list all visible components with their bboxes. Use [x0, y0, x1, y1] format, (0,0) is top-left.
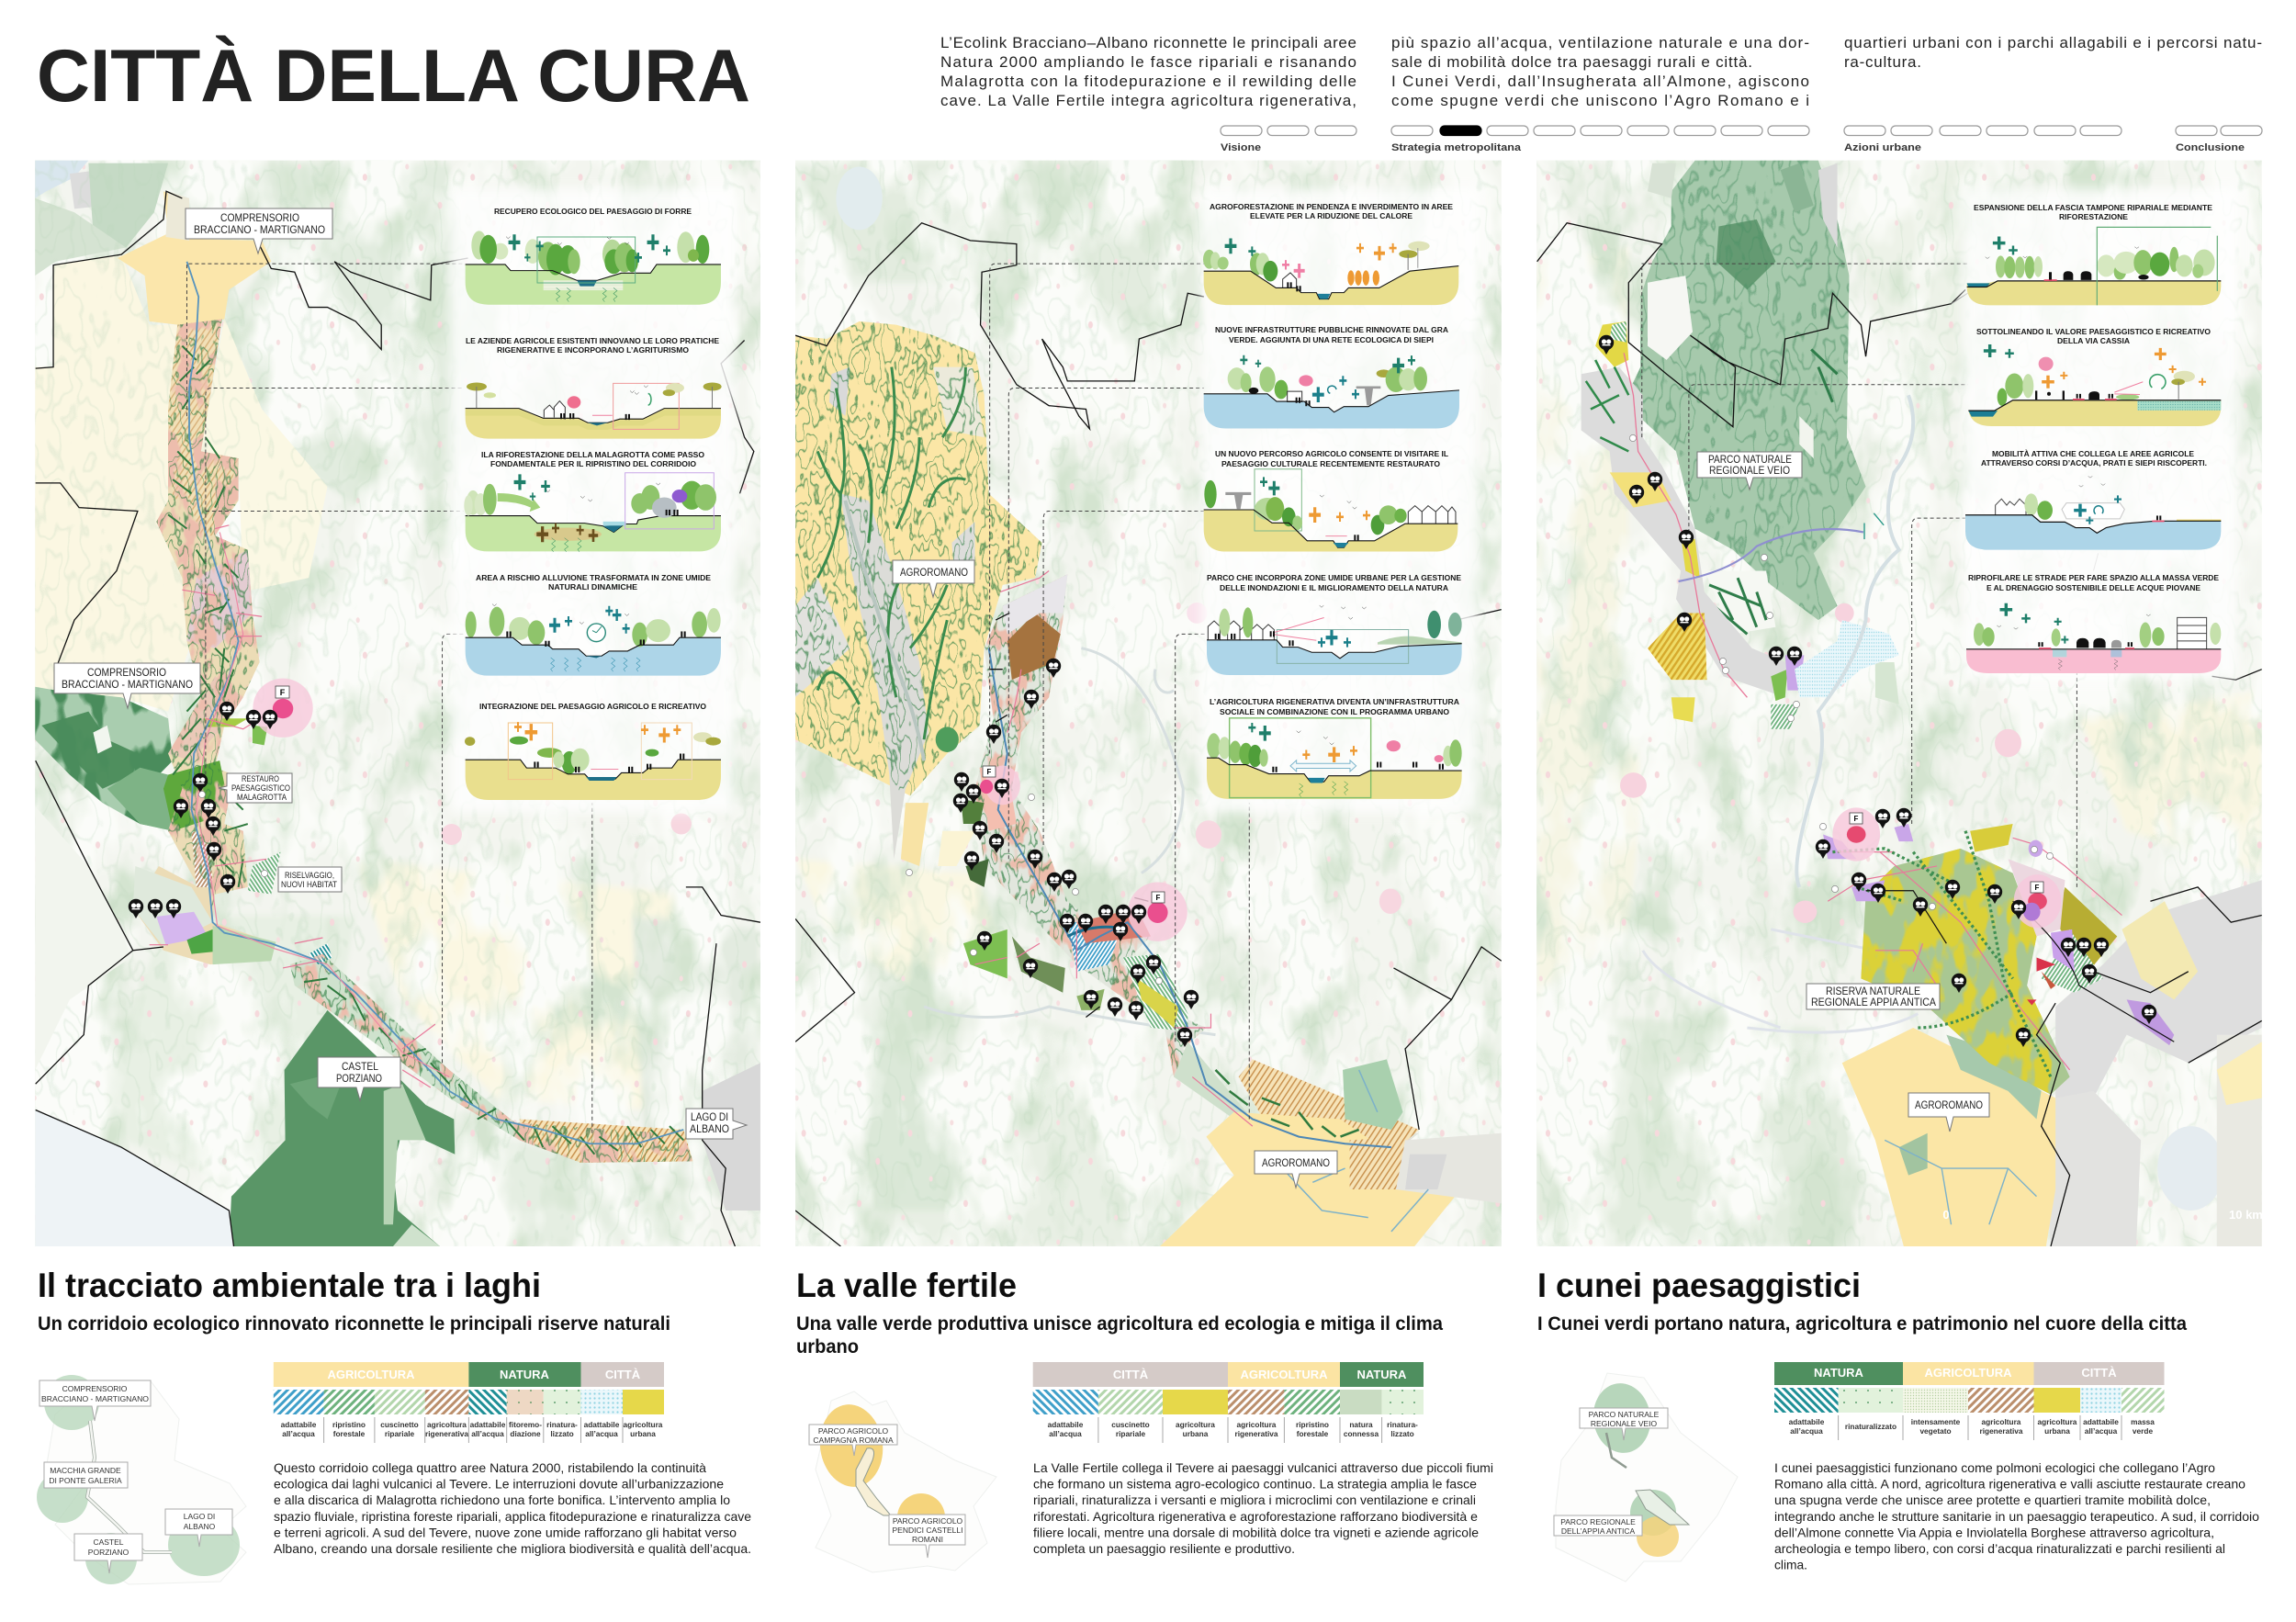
map 2 icons: F — [987, 768, 992, 776]
progress navigation labels: Visione — [1221, 142, 1261, 153]
block 1 subheading: Un corridoio ecologico rinnovato riconnette le principali riserve naturali — [38, 1313, 670, 1335]
callout: Agroromano north: AGROROMANO — [900, 568, 968, 579]
block 3 body text: Romano alla città. A nord, agricoltura rigenerativa e valli asciutte restaurate creano — [1774, 1477, 2245, 1492]
callout: Lago di Albano: LAGO DI — [691, 1112, 728, 1123]
section titles, map 2: L’AGRICOLTURA RIGENERATIVA DIVENTA UN’INFRASTRUTTURA — [1210, 697, 1459, 706]
callout: Riserva Naturale Regionale Appia Antica — [1806, 984, 1940, 1009]
progress navigation labels: Azioni urbane — [1844, 142, 1921, 153]
block 2 legend: urbana — [1183, 1429, 1209, 1438]
section titles, map 3: DELLA VIA CASSIA — [2057, 336, 2130, 345]
block 2 legend: adattabile — [1048, 1420, 1084, 1429]
block 2 body text: completa un paesaggio resiliente e produttivo. — [1033, 1541, 1295, 1556]
block 3 mini map: PARCO REGIONALE — [1560, 1517, 1636, 1526]
block 3 legend — [1774, 1362, 2164, 1440]
pink node halo — [253, 679, 313, 738]
block 1 body text — [274, 1460, 751, 1556]
callout: Castel Porziano: PORZIANO — [336, 1074, 382, 1085]
block 1 legend: AGRICOLTURA — [327, 1368, 415, 1381]
callout: Agroromano south — [1255, 1151, 1337, 1188]
dashed leader lines — [990, 264, 1249, 1119]
block 1 mini map: MACCHIA GRANDE — [50, 1466, 121, 1475]
block 1 mini map: PORZIANO — [88, 1548, 129, 1557]
intro text, three columns: Malagrotta con la fitodepurazione e il rewilding delle — [940, 73, 1356, 90]
intro text, three columns: ra-cultura. — [1844, 53, 1921, 71]
callout: Restauro paesaggistico Malagrotta — [219, 773, 292, 803]
block 1 body text: Albano, creando una dorsale resiliente che migliora biodiversità e qualità dell’acqua. — [274, 1541, 751, 1556]
callout: Parco Naturale Regionale Veio: REGIONALE VEIO — [1709, 466, 1790, 477]
south gray land and lakes — [2055, 880, 2262, 1098]
callout: Lago di Albano: ALBANO — [690, 1124, 729, 1135]
section titles, map 2: SOCIALE IN COMBINAZIONE CON IL PROGRAMMA URBANO — [1220, 707, 1449, 716]
map 3 scale labels: 0 — [1942, 1208, 1950, 1222]
block 1 body text: e terreni agricoli. A sud del Tevere, nuove zone umide rafforzano gli habitat verso — [274, 1525, 737, 1539]
section titles, map 1 — [466, 207, 719, 711]
block 2 legend: CITTÀ — [1113, 1368, 1149, 1381]
section: slope agroforestry — [1203, 239, 1458, 305]
callout: Comprensorio Bracciano Martignano lower — [54, 663, 200, 708]
block 3 subheading: I Cunei verdi portano natura, agricoltura e patrimonio nel cuore della citta — [1537, 1313, 2187, 1335]
block 2 legend: agricoltura — [1176, 1420, 1215, 1429]
block 3 legend: vegetato — [1919, 1426, 1952, 1436]
section: flood wetlands — [466, 604, 721, 676]
block 1 legend: adattabile — [281, 1420, 317, 1429]
block 2 subheading — [796, 1313, 1443, 1357]
block 1 mini map: LAGO DI — [184, 1512, 215, 1521]
section: forre recovery — [466, 231, 721, 305]
callout: Lago di Albano — [686, 1109, 747, 1139]
block 3 legend: all’acqua — [1790, 1426, 1823, 1436]
block 1 legend: agricoltura — [427, 1420, 467, 1429]
block 2 mini map: ROMANI — [912, 1535, 943, 1544]
Agro Romano yellow area — [795, 321, 1042, 795]
pale agricultural land left — [35, 254, 189, 718]
section: road reprofiling — [1966, 603, 2221, 673]
block 2 mini map: PARCO AGRICOLO — [818, 1426, 889, 1436]
section titles, map 1: RECUPERO ECOLOGICO DEL PAESAGGIO DI FORRE — [494, 207, 692, 216]
section titles, map 3: MOBILITÀ ATTIVA CHE COLLEGA LE AREE AGRICOLE — [1992, 449, 2194, 458]
block 3 body text: una spugna verde che unisce aree protette e quartieri tramite mobilità dolce, — [1774, 1492, 2211, 1507]
section titles, map 3: RIFORESTAZIONE — [2059, 212, 2128, 221]
intro text, three columns: quartieri urbani con i parchi allagabili e i percorsi natu- — [1844, 34, 2262, 51]
block 2 legend: agricoltura — [1237, 1420, 1277, 1429]
block 3 legend: adattabile — [2083, 1417, 2119, 1426]
callout: Agroromano south: AGROROMANO — [1262, 1158, 1330, 1169]
section diagrams, map 2 — [1203, 239, 1462, 799]
callout: Agroromano: AGROROMANO — [1915, 1100, 1983, 1111]
block 1 legend: CITTÀ — [605, 1368, 641, 1381]
panel: map 3, cunei paesaggistici — [1536, 161, 2262, 1246]
progress navigation labels — [1221, 142, 2245, 153]
block 1 heading: Il tracciato ambientale tra i laghi — [38, 1267, 541, 1304]
block 3 body text: integrando anche le strutture sanitarie in un paesaggio terapeutico. A sud, il corridoio — [1774, 1509, 2259, 1524]
callout: Riselvaggio nuovi habitat: RISELVAGGIO, — [285, 871, 334, 880]
block 3 heading: I cunei paesaggistici — [1537, 1267, 1861, 1304]
section titles, map 2: DELLE INONDAZIONI E IL MIGLIORAMENTO DELLA NATURA — [1220, 583, 1448, 592]
dashed leader lines — [1642, 264, 2077, 887]
map 2 icons: F — [1156, 894, 1161, 902]
map 3 scale labels: 10 km — [2229, 1208, 2263, 1222]
block 2 legend: rigenerativa — [1234, 1429, 1278, 1438]
block 3 legend: rinaturalizzato — [1845, 1422, 1896, 1431]
section titles, map 1: FONDAMENTALE PER IL RIPRISTINO DEL CORRIDOIO — [490, 459, 696, 468]
forest area left — [35, 687, 173, 831]
block 1 mini map: BRACCIANO - MARTIGNANO — [41, 1394, 149, 1403]
section: public infrastructure — [1204, 355, 1459, 429]
section diagrams, map 3 — [1965, 227, 2221, 673]
section titles, map 1: LE AZIENDE AGRICOLE ESISTENTI INNOVANO LE LORO PRATICHE — [466, 336, 719, 345]
section titles, map 2: NUOVE INFRASTRUTTURE PUBBLICHE RINNOVATE DAL GRA — [1215, 325, 1448, 334]
callout: Castel Porziano: CASTEL — [342, 1062, 379, 1073]
progress navigation labels: Strategia metropolitana — [1391, 142, 1522, 153]
block 1 legend: all’acqua — [282, 1429, 315, 1438]
block 1 legend: ripristino — [332, 1420, 366, 1429]
block 1 legend: cuscinetto — [380, 1420, 419, 1429]
callout: Riselvaggio nuovi habitat — [278, 867, 342, 892]
intro text, three columns: Natura 2000 ampliando le fasce ripariali e risanando — [940, 53, 1356, 71]
block 2 mini map: PARCO AGRICOLO — [893, 1516, 963, 1526]
section titles, map 1: NATURALI DINAMICHE — [548, 582, 637, 591]
block 2 subheading: urbano — [796, 1336, 859, 1357]
callout: Riserva Naturale Regionale Appia Antica: RISERVA NATURALE — [1826, 986, 1920, 997]
corridor — [133, 320, 276, 964]
block 1 mini map: COMPRENSORIO — [62, 1384, 128, 1393]
callout: Agroromano — [1908, 1093, 1989, 1132]
section titles, map 3: ESPANSIONE DELLA FASCIA TAMPONE RIPARIALE MEDIANTE — [1974, 203, 2212, 212]
block 2 legend: connessa — [1344, 1429, 1379, 1438]
block 2 legend: ripariale — [1116, 1429, 1146, 1438]
block 3 body text: clima. — [1774, 1558, 1807, 1572]
block 2 legend: forestale — [1297, 1429, 1329, 1438]
corridor — [975, 574, 1419, 1155]
callout: Comprensorio Bracciano Martignano top: COMPRENSORIO — [220, 213, 299, 224]
block 2 body text: La Valle Fertile collega il Tevere ai paesaggi vulcanici attraverso due piccoli fiumi — [1033, 1460, 1493, 1475]
progress navigation pills — [1221, 126, 2262, 136]
block 2 mini map: CAMPAGNA ROMANA — [813, 1436, 894, 1445]
section titles, map 3: E AL DRENAGGIO SOSTENIBILE DELLE ACQUE PIOVANE — [1986, 583, 2200, 592]
map 3 scale labels — [1942, 1208, 2263, 1222]
block 3 legend: verde — [2133, 1426, 2153, 1436]
block 3 legend: AGRICOLTURA — [1924, 1366, 2012, 1380]
map 1 icons — [129, 686, 289, 918]
block 3 mini map — [1554, 1373, 1738, 1582]
block 3 body text — [1774, 1460, 2259, 1572]
section titles, map 1: INTEGRAZIONE DEL PAESAGGIO AGRICOLO E RICREATIVO — [479, 702, 706, 711]
block 1 legend: adattabile — [470, 1420, 506, 1429]
block 1 legend: all’acqua — [471, 1429, 504, 1438]
callout: Castel Porziano — [318, 1057, 400, 1100]
section: riparian buffer — [1967, 227, 2221, 305]
block 3 legend: adattabile — [1789, 1417, 1825, 1426]
block 3 legend: all’acqua — [2085, 1426, 2118, 1436]
block 1 legend: fitoremo- — [509, 1420, 542, 1429]
section titles, map 3: ATTRAVERSO CORSI D’ACQUA, PRATI E SIEPI RISCOPERTI. — [1981, 458, 2207, 467]
block 1 body text: e alla discarica di Malagrotta richiedono una forte bonifica. L’intervento amplia lo — [274, 1492, 730, 1507]
block 2 mini map — [809, 1391, 996, 1572]
block 2 legend: all’acqua — [1049, 1429, 1082, 1438]
block 1 legend: agricoltura — [624, 1420, 663, 1429]
block 2 legend — [1033, 1362, 1424, 1443]
block 3 legend: intensamente — [1911, 1417, 1961, 1426]
Veio regional park — [1624, 161, 1866, 620]
coast and sea — [35, 1110, 233, 1246]
callout: Restauro paesaggistico Malagrotta: PAESAGGISTICO — [231, 783, 290, 793]
block 1 mini map — [37, 1375, 246, 1584]
block 2 legend: ripristino — [1296, 1420, 1329, 1429]
map 1 icons: F — [280, 688, 286, 697]
section titles, map 2: PARCO CHE INCORPORA ZONE UMIDE URBANE PER LA GESTIONE — [1207, 573, 1461, 582]
block 2 body text: che formano un sistema agro-ecologico continuo. La strategia amplia le fasce — [1033, 1477, 1477, 1492]
section titles, map 2 — [1207, 202, 1461, 716]
block 1 body text: spazio fluviale, ripristina foreste ripariali, applica fitodepurazione e rinaturalizza cave — [274, 1509, 751, 1524]
block 1 legend: urbana — [630, 1429, 656, 1438]
section: agricultural farms — [466, 383, 722, 439]
block 2 subheading: Una valle verde produttiva unisce agricoltura ed ecologia e mitiga il clima — [796, 1313, 1443, 1335]
black boundary lines — [1537, 223, 2262, 1246]
callout: Agroromano north — [893, 560, 974, 597]
section titles, map 3 — [1968, 203, 2219, 592]
section titles, map 2: UN NUOVO PERCORSO AGRICOLO CONSENTE DI VISITARE IL — [1215, 449, 1448, 458]
intro text, three columns: cave. La Valle Fertile integra agricoltura rigenerativa, — [940, 92, 1356, 109]
block 3 legend: agricoltura — [2038, 1417, 2077, 1426]
pink node — [1128, 883, 1187, 941]
block 1 legend: rigenerativa — [425, 1429, 468, 1438]
block 1 legend: lizzato — [550, 1429, 574, 1438]
section titles, map 1: RIGENERATIVE E INCORPORANO L’AGRITURISMO — [497, 345, 689, 355]
block 2 body text: filiere locali, mentre una dorsale di mobilità dolce tra vigneti e aziende agricole — [1033, 1525, 1479, 1539]
block 1 legend: forestale — [333, 1429, 366, 1438]
panel: map 2, valle fertile — [795, 161, 1502, 1246]
black boundary lines — [36, 191, 468, 368]
callout: Parco Naturale Regionale Veio — [1697, 452, 1802, 490]
block 3 legend: NATURA — [1814, 1366, 1864, 1380]
panel: map 1, tracciato ambientale — [35, 161, 760, 1246]
section diagrams, map 1 — [464, 231, 722, 800]
Agro Romano south — [1842, 1028, 2055, 1246]
block 1 legend: ripariale — [385, 1429, 415, 1438]
block 1 legend: all’acqua — [585, 1429, 618, 1438]
intro text, three columns — [940, 34, 2262, 109]
section titles, map 3: RIPROFILARE LE STRADE PER FARE SPAZIO ALLA MASSA VERDE — [1968, 573, 2219, 582]
block 2 legend: lizzato — [1390, 1429, 1414, 1438]
block 3 mini map: DELL’APPIA ANTICA — [1561, 1526, 1635, 1536]
block 1 mini map: CASTEL — [93, 1538, 124, 1547]
callout: Restauro paesaggistico Malagrotta: MALAGROTTA — [237, 793, 287, 802]
block 3 legend: CITTÀ — [2081, 1366, 2117, 1380]
dashed leader lines — [186, 264, 592, 1133]
section: active mobility — [1965, 476, 2221, 550]
corridor north — [1581, 367, 1785, 697]
panel: map 2 white backdrop for sections — [1201, 188, 1479, 813]
block 2 legend: AGRICOLTURA — [1240, 1368, 1328, 1381]
block 3 legend: urbana — [2044, 1426, 2070, 1436]
map 3 icons — [1599, 335, 2156, 1047]
block 1 legend: NATURA — [500, 1368, 550, 1381]
intro text, three columns: più spazio all’acqua, ventilazione naturale e una dor- — [1391, 34, 1809, 51]
block 1 legend: diazione — [510, 1429, 541, 1438]
panel: map 3 white backdrop for sections — [1963, 188, 2238, 680]
block 1 legend: rinatura- — [546, 1420, 578, 1429]
block 3 legend: massa — [2131, 1417, 2155, 1426]
block 1 body text: Questo corridoio collega quattro aree Natura 2000, ristabilendo la continuità — [274, 1460, 706, 1475]
callout: Parco Naturale Regionale Veio: PARCO NATURALE — [1708, 455, 1792, 466]
block 3 body text: archeologia e tempo libero, con corsi d’acqua rinaturalizzati e parchi resilienti al — [1774, 1541, 2225, 1556]
block 2 mini map: PENDICI CASTELLI — [893, 1526, 962, 1535]
panel: map 1 white backdrop for sections — [450, 188, 735, 813]
section titles, map 2: VERDE. AGGIUNTA DI UNA RETE ECOLOGICA DI SIEPI — [1229, 335, 1434, 344]
block 3 mini map: PARCO NATURALE — [1589, 1410, 1660, 1419]
block 2 body text — [1033, 1460, 1493, 1556]
section titles, map 2: ELEVATE PER LA RIDUZIONE DEL CALORE — [1250, 211, 1412, 220]
Castel Porziano forest — [229, 1010, 455, 1246]
block 1 mini map: ALBANO — [184, 1522, 216, 1531]
pink nodes — [1832, 807, 1880, 862]
block 1 mini map: DI PONTE GALERIA — [49, 1476, 122, 1485]
section: agricultural and recreational integration — [465, 722, 721, 800]
intro text, three columns: come spugne verdi che uniscono l’Agro Romano e i — [1391, 92, 1809, 109]
block 2 legend: NATURA — [1357, 1368, 1407, 1381]
section titles, map 3: SOTTOLINEANDO IL VALORE PAESAGGISTICO E RICREATIVO — [1976, 327, 2211, 336]
block 3 body text: I cunei paesaggistici funzionano come polmoni ecologici che collegano l’Agro — [1774, 1460, 2215, 1475]
yellow comprensorio — [118, 191, 271, 325]
callout: Comprensorio Bracciano Martignano lower: BRACCIANO - MARTIGNANO — [62, 680, 193, 691]
callout: Riserva Naturale Regionale Appia Antica: REGIONALE APPIA ANTICA — [1811, 997, 1936, 1008]
section: Via Cassia — [1968, 344, 2221, 426]
progress navigation labels: Conclusione — [2176, 142, 2245, 153]
section: regenerative agriculture social infrastructure — [1207, 718, 1462, 799]
block 3 mini map: REGIONALE VEIO — [1591, 1419, 1658, 1428]
callout: Riselvaggio nuovi habitat: NUOVI HABITAT — [281, 880, 337, 889]
intro text, three columns: sale di mobilità dolce tra paesaggi rurali e città. — [1391, 53, 1752, 71]
block 3 legend: agricoltura — [1982, 1417, 2021, 1426]
block 2 body text: riforestati. Agricoltura rigenerativa e agroforestazione rafforzano biodiversità e — [1033, 1509, 1478, 1524]
map 3 icons: F — [1854, 815, 1859, 823]
section titles, map 1: AREA A RISCHIO ALLUVIONE TRASFORMATA IN ZONE UMIDE — [476, 573, 711, 582]
block 1 legend: adattabile — [584, 1420, 620, 1429]
section: agricultural route — [1204, 469, 1458, 552]
block 2 legend: natura — [1349, 1420, 1373, 1429]
block 2 body text: ripariali, rinaturalizza i versanti e migliora i microclimi con ventilazione e crinali — [1033, 1492, 1476, 1507]
black boundary lines — [795, 223, 1502, 1246]
callout: Comprensorio Bracciano Martignano top: BRACCIANO - MARTIGNANO — [194, 225, 325, 236]
section titles, map 1: ILA RIFORESTAZIONE DELLA MALAGROTTA COME PASSO — [481, 450, 704, 459]
intro text, three columns: I Cunei Verdi, dall’Insugherata all’Almone, agiscono — [1391, 73, 1809, 90]
section titles, map 2: PAESAGGIO CULTURALE RECENTEMENTE RESTAURATO — [1221, 459, 1440, 468]
intro text, three columns: L’Ecolink Bracciano–Albano riconnette le principali aree — [940, 34, 1356, 51]
callout: Restauro paesaggistico Malagrotta: RESTAURO — [242, 774, 279, 783]
block 3 legend: rigenerativa — [1979, 1426, 2023, 1436]
block 1 body text: ecologica dai laghi vulcanici al Tevere. Le interruzioni dovute all’urbanizzazione — [274, 1477, 724, 1492]
block 1 legend — [274, 1362, 664, 1443]
map 3 icons: F — [2035, 884, 2040, 892]
section titles, map 2: AGROFORESTAZIONE IN PENDENZA E INVERDIMENTO IN AREE — [1210, 202, 1453, 211]
section: Malagrotta reforestation — [464, 473, 721, 552]
block 2 legend: cuscinetto — [1111, 1420, 1150, 1429]
map 2 icons — [906, 659, 1199, 1047]
title: CITTÀ DELLA CURA — [37, 35, 750, 118]
river and slow-mobility path — [186, 262, 683, 1143]
central corridor — [1861, 849, 2070, 1095]
block 2 legend: rinatura- — [1387, 1420, 1418, 1429]
agro romano south — [1160, 1112, 1461, 1246]
callout: Comprensorio Bracciano Martignano top — [186, 208, 332, 253]
section: urban wetlands park — [1207, 605, 1462, 675]
callout: Comprensorio Bracciano Martignano lower: COMPRENSORIO — [87, 668, 166, 679]
block 2 heading: La valle fertile — [796, 1267, 1017, 1304]
block 3 body text: dell’Almone connette Via Appia e Inviolatella Borghese attraverso agricoltura, — [1774, 1525, 2214, 1539]
